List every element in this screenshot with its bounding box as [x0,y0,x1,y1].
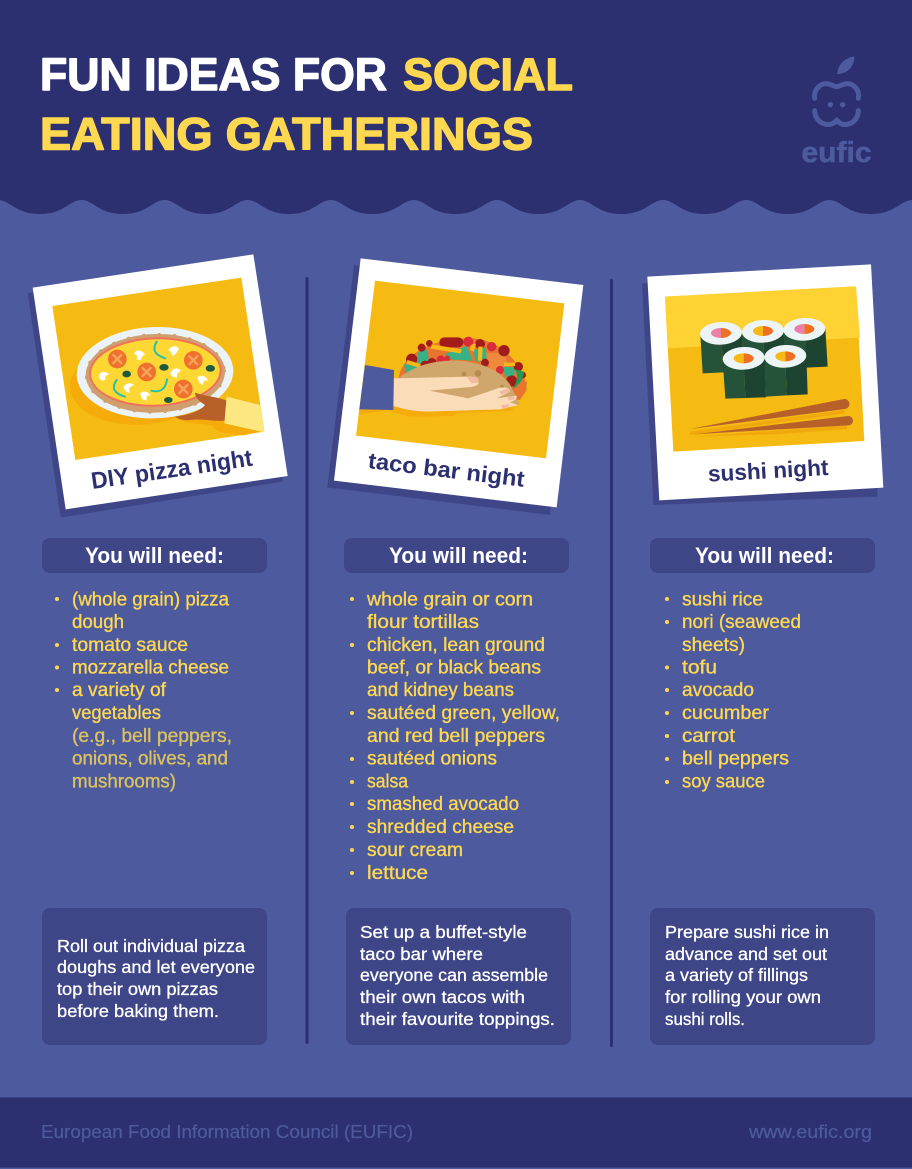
panel: sushi tip: advance and set out [665,944,827,964]
list: taco ingredients: and kidney beans [367,680,514,701]
column divider left [306,277,308,1044]
list: taco ingredients: beef, or black beans [367,658,541,678]
title: EATING GATHERINGS [40,108,533,160]
panel: you will need, pizza: You will need: [85,543,224,568]
list: taco ingredients [350,590,560,884]
list: sushi ingredients [665,590,801,792]
panel: taco tip: Set up a buffet-style [360,922,527,942]
panel: you will need, taco [344,538,569,573]
list: sushi ingredients: soy sauce [682,772,765,792]
logo: eufic: eufic [802,137,872,169]
icon: taco [359,337,527,417]
polaroid: sushi night [642,264,883,505]
panel: you will need, taco: You will need: [389,543,528,568]
panel: taco tip: their own tacos with [360,987,525,1007]
panel: sushi tip: Prepare sushi rice in [665,922,829,942]
list: sushi ingredients: carrot [682,726,736,747]
caption: taco bar night: taco bar night [367,447,527,492]
column divider right [610,279,613,1047]
logo: eufic [802,56,872,169]
panel: you will need, pizza [42,538,267,573]
list: sushi ingredients: bell peppers [682,748,789,770]
polaroid: taco bar night [327,258,583,515]
footer: European Food Information Council (EUFIC) [41,1121,413,1142]
list: pizza ingredients: a variety of [72,680,167,701]
panel: you will need, sushi: You will need: [695,543,834,568]
list: pizza ingredients: (e.g., bell peppers, [72,726,232,747]
list: pizza ingredients: mozzarella cheese [72,658,229,678]
caption: sushi night: sushi night [707,454,830,487]
caption: DIY pizza night: DIY pizza night [89,446,254,495]
panel: taco tip [346,908,571,1045]
list: sushi ingredients: cucumber [682,703,770,724]
panel: pizza tip: doughs and let everyone [57,957,255,977]
panel: taco tip: everyone can assemble [360,965,548,985]
panel: pizza tip: before baking them. [57,1001,219,1021]
list: taco ingredients: sautéed green, yellow, [367,703,560,724]
list: taco ingredients: shredded cheese [367,817,514,838]
list: taco ingredients: salsa [367,772,408,792]
title [40,49,573,160]
list: taco ingredients: chicken, lean ground [367,635,545,656]
list: taco ingredients: sautéed onions [367,748,497,770]
panel: pizza tip [42,908,267,1045]
list: pizza ingredients [55,590,232,792]
list: taco ingredients: flour tortillas [367,612,479,633]
panel: sushi tip [650,908,875,1045]
list: taco ingredients: smashed avocado [367,794,519,815]
list: sushi ingredients: sheets) [682,635,745,656]
list: pizza ingredients: (whole grain) pizza [72,590,229,610]
list: pizza ingredients: vegetables [72,703,161,724]
list: sushi ingredients: tofu [682,658,717,678]
list: taco ingredients: sour cream [367,840,463,861]
panel: pizza tip: Roll out individual pizza [57,936,245,956]
panel: taco tip: taco bar where [360,944,483,964]
footer [0,1098,912,1168]
header band with wavy edge [0,0,912,214]
list: taco ingredients: whole grain or corn [366,590,533,610]
list: pizza ingredients: mushrooms) [72,772,176,792]
list: sushi ingredients: avocado [682,680,754,701]
list: pizza ingredients: tomato sauce [72,635,188,656]
panel: taco tip: their favourite toppings. [360,1009,555,1029]
icon: chopsticks [688,399,853,437]
footer: www.eufic.org [748,1121,872,1142]
list: sushi ingredients: nori (seaweed [682,612,801,633]
panel: pizza tip: top their own pizzas [57,979,218,999]
icon: pizza [68,324,264,435]
title: FUN IDEAS FOR [40,49,387,100]
icon: sushi rolls [699,317,828,399]
list: pizza ingredients: onions, olives, and [72,748,228,770]
title: SOCIAL [403,49,573,100]
panel: you will need, sushi [650,538,875,573]
panel: sushi tip: for rolling your own [665,987,821,1007]
polaroid: DIY pizza night [28,254,288,518]
list: sushi ingredients: sushi rice [682,590,763,610]
panel: sushi tip: a variety of fillings [665,965,808,985]
panel: sushi tip: sushi rolls. [665,1009,745,1029]
list: taco ingredients: lettuce [367,863,428,884]
list: taco ingredients: and red bell peppers [367,726,545,747]
list: pizza ingredients: dough [72,612,124,633]
